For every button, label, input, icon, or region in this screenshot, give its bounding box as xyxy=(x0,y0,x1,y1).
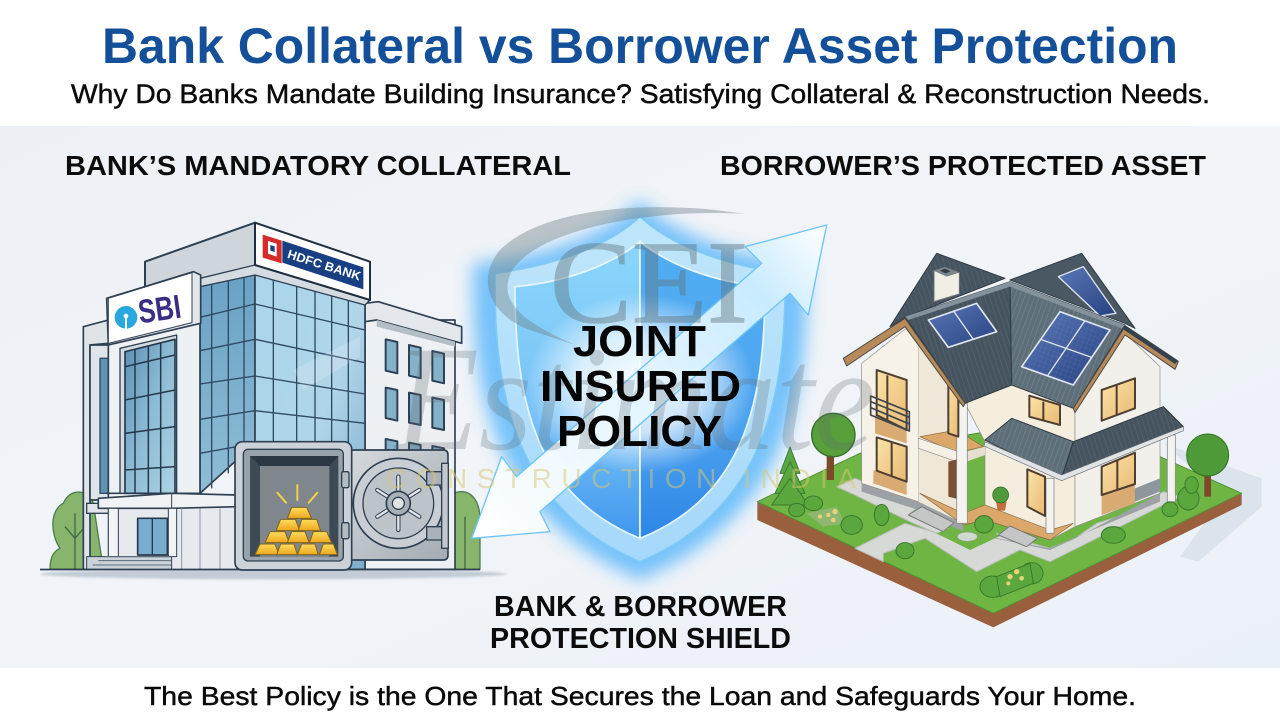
porch columns xyxy=(957,403,1175,533)
right wing xyxy=(365,302,462,569)
stone planter xyxy=(957,532,977,541)
subtitle: Why Do Banks Mandate Building Insurance? Satisfying Collateral & Reconstruction Needs. xyxy=(71,79,1210,109)
potted plant xyxy=(993,487,1009,511)
SBI tower with glass front xyxy=(83,272,201,569)
illustration: shield and two-way arrow xyxy=(472,200,827,580)
entrance canopy and door xyxy=(87,493,237,569)
title: Bank Collateral vs Borrower Asset Protection xyxy=(102,18,1178,74)
logo: SBI xyxy=(115,289,183,331)
sign: HDFC Bank: HDFC BANK xyxy=(286,247,363,283)
flowers xyxy=(818,509,1024,585)
porch steps xyxy=(908,507,1037,547)
footer tagline: The Best Policy is the One That Secures the Loan and Safeguards Your Home. xyxy=(144,681,1136,711)
foundation xyxy=(862,483,1160,550)
ground line xyxy=(40,569,480,570)
solar panels xyxy=(928,303,1110,385)
illustration band xyxy=(0,126,1280,668)
heading: borrower asset: BORROWER’S PROTECTED ASSET xyxy=(720,150,1206,181)
outer shield xyxy=(495,217,785,562)
shield label: joint insured policy: INSURED xyxy=(540,362,741,411)
stone path xyxy=(837,478,1180,572)
main roof xyxy=(843,282,1178,413)
shrubs and tree right xyxy=(841,434,1229,597)
inner shield right xyxy=(640,242,765,538)
back solar panel xyxy=(1058,267,1116,316)
shield label: joint insured policy: POLICY xyxy=(557,407,722,456)
double-headed arrow xyxy=(472,225,827,538)
house walls xyxy=(862,328,1160,540)
watermark Estimate: Estimate xyxy=(393,316,875,482)
illustration: bank building with vault xyxy=(40,223,507,579)
shield caption: PROTECTION SHIELD xyxy=(490,623,791,655)
shield caption xyxy=(490,591,791,655)
conifer xyxy=(772,447,808,505)
ground shadow xyxy=(40,569,507,579)
house windows xyxy=(877,370,1135,516)
vault door xyxy=(347,450,448,560)
shield label: joint insured policy xyxy=(540,317,741,456)
shield caption: BANK & BORROWER xyxy=(494,591,787,623)
balcony floors xyxy=(918,430,1073,540)
glass tower right face xyxy=(200,265,370,569)
vault frame and interior xyxy=(235,442,352,570)
center glow xyxy=(527,293,753,473)
trees beside bank xyxy=(50,492,480,569)
balcony railing xyxy=(871,396,909,431)
shield label: joint insured policy: JOINT xyxy=(573,317,706,366)
shield glow xyxy=(473,200,807,580)
gold sparkle xyxy=(277,485,317,503)
glass tower left face xyxy=(200,273,255,493)
watermark CEI: CEI xyxy=(550,217,748,348)
left tree xyxy=(812,413,855,480)
house shadow xyxy=(1163,443,1262,562)
inner shield left xyxy=(515,242,640,538)
back roof xyxy=(890,253,1135,328)
plot lawn xyxy=(757,430,1242,613)
rear block xyxy=(145,223,255,290)
plot soil xyxy=(757,493,1242,627)
illustration: house on plot xyxy=(757,253,1262,627)
watermark construction line: CONSTRUCTION INDIA xyxy=(386,463,856,494)
porch roof xyxy=(984,407,1183,481)
flower hedge left xyxy=(789,496,845,527)
watermark swoosh xyxy=(488,207,745,345)
watermark: CEI Estimate Construction xyxy=(386,207,875,494)
planter lawn xyxy=(937,520,1000,550)
heading: bank collateral: BANK’S MANDATORY COLLATERAL xyxy=(65,150,571,181)
logo: SBI: SBI xyxy=(136,289,183,331)
gold bars xyxy=(255,507,337,555)
sign: HDFC Bank xyxy=(255,223,370,300)
